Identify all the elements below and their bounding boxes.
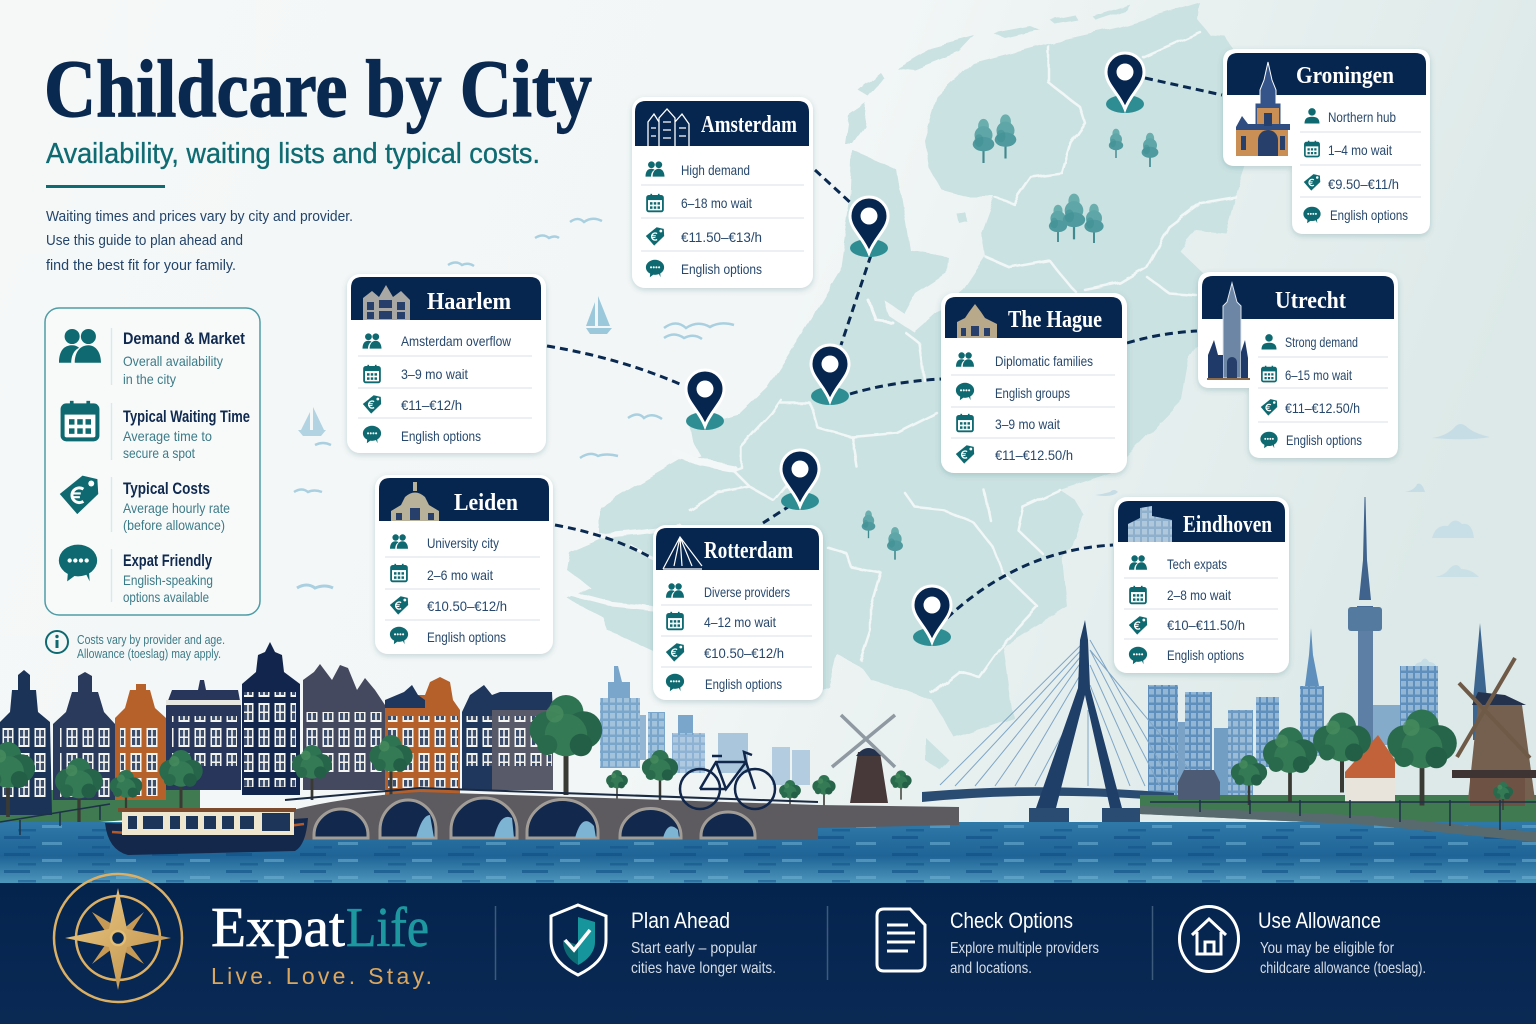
legend: demand and market: Overall availability — [123, 353, 223, 369]
water — [0, 822, 1536, 884]
card: Leiden: €10.50–€12/h — [427, 598, 507, 614]
skyline: TV tower — [1348, 497, 1382, 746]
icon: sailboat — [586, 296, 612, 334]
tip: check options: and locations. — [950, 960, 1032, 977]
card: Leiden: Leiden — [454, 490, 518, 516]
legend: typical costs: Average hourly rate — [123, 500, 230, 516]
tip: plan ahead: Plan Ahead — [631, 908, 730, 933]
card: Haarlem — [347, 274, 546, 453]
title: Childcare by City — [44, 43, 592, 134]
note: costs info: Allowance (toeslag) may apply. — [77, 647, 221, 661]
windmill: small — [832, 715, 895, 803]
card: Utrecht: Strong demand — [1285, 334, 1358, 350]
card: Haarlem: English options — [401, 428, 481, 444]
tip: use allowance: You may be eligible for — [1260, 940, 1395, 957]
card: Leiden: 2–6 mo wait — [427, 567, 493, 583]
tip: plan ahead: cities have longer waits. — [631, 960, 776, 977]
tip: use allowance: childcare allowance (toeslag). — [1260, 960, 1426, 977]
tip: check options — [877, 908, 1099, 977]
intro text: Waiting times and prices vary by city and provider. — [46, 208, 353, 225]
icon: distant sailboat — [298, 407, 326, 436]
card: The Hague: English groups — [995, 385, 1070, 401]
tip: use allowance — [1180, 906, 1426, 977]
trees — [0, 695, 1513, 824]
card: Haarlem: Amsterdam overflow — [401, 333, 512, 349]
logo: compass — [54, 874, 182, 1002]
tip: plan ahead — [551, 905, 776, 977]
sea decorations: waves and sailboats — [294, 219, 734, 588]
intro text: Use this guide to plan ahead and — [46, 232, 243, 249]
ground: right bank greenery — [1140, 795, 1536, 835]
header icon: gabled houses — [363, 285, 410, 320]
card: Groningen: English options — [1330, 207, 1408, 223]
legend: waiting time: secure a spot — [123, 445, 195, 461]
card: Rotterdam: 4–12 mo wait — [704, 614, 776, 630]
legend: demand and market: in the city — [123, 371, 176, 387]
logo: wordmark — [211, 897, 432, 989]
legend: expat friendly: Expat Friendly — [123, 551, 212, 570]
bridge: Erasmus — [922, 620, 1200, 822]
panel: legend — [45, 308, 260, 615]
logo: wordmark: Expat — [211, 897, 345, 959]
skyline: distant blue buildings left — [600, 666, 810, 785]
card: Utrecht: 6–15 mo wait — [1285, 367, 1352, 383]
sea channels through the south-west delta — [566, 300, 892, 608]
card: Leiden — [375, 475, 553, 654]
pins — [686, 53, 1144, 646]
canal houses — [0, 642, 553, 815]
bicycle — [680, 752, 775, 809]
boat — [105, 808, 308, 855]
card: Leiden: English options — [427, 629, 506, 645]
card: The Hague: 3–9 mo wait — [995, 416, 1060, 432]
card: The Hague: The Hague — [1008, 307, 1102, 333]
card: Groningen: Northern hub — [1328, 109, 1396, 125]
skyline: blue towers right — [1148, 628, 1438, 812]
legend: expat friendly: options available — [123, 589, 209, 605]
tip: check options: Explore multiple providers — [950, 940, 1099, 957]
card: Rotterdam: €10.50–€12/h — [704, 645, 784, 661]
header icon: domed hall — [391, 482, 439, 521]
card: Utrecht: Utrecht — [1275, 288, 1346, 314]
right quay edge — [1140, 806, 1536, 842]
card: Haarlem: Haarlem — [427, 289, 511, 315]
card: Groningen: Groningen — [1296, 63, 1394, 89]
card: Utrecht — [1198, 272, 1398, 458]
card: Rotterdam: English options — [705, 676, 782, 692]
card: Groningen — [1223, 49, 1430, 234]
ground: left bank greenery — [0, 790, 200, 838]
legend: waiting time: Average time to — [123, 428, 212, 444]
card: Haarlem: €11–€12/h — [401, 397, 462, 413]
card: Eindhoven: €10–€11.50/h — [1167, 617, 1245, 633]
note: costs info — [46, 631, 225, 661]
card: Groningen: 1–4 mo wait — [1328, 142, 1392, 158]
card: Amsterdam: English options — [681, 261, 762, 277]
house: orange roof on right bank — [1178, 735, 1395, 802]
card: Amsterdam: 6–18 mo wait — [681, 195, 752, 211]
legend: expat friendly — [59, 545, 213, 605]
card: Utrecht: English options — [1286, 432, 1362, 448]
intro text — [46, 208, 353, 274]
card: Eindhoven — [1114, 497, 1289, 673]
map trees — [862, 114, 1158, 560]
windmill: large with church spire — [1452, 623, 1536, 806]
map of the Netherlands — [566, 3, 1246, 770]
stone arch bridge — [285, 788, 959, 840]
logo: wordmark: Life — [346, 897, 429, 959]
card: Amsterdam: Amsterdam — [701, 112, 797, 138]
card: Amsterdam — [632, 97, 813, 288]
card: Haarlem: 3–9 mo wait — [401, 366, 468, 382]
legend: demand and market: Demand & Market — [123, 329, 245, 348]
legend: typical costs: (before allowance) — [123, 517, 225, 533]
header icon: canal houses — [648, 109, 689, 146]
card: Amsterdam: High demand — [681, 162, 750, 178]
tip: plan ahead: Start early – popular — [631, 940, 758, 957]
legend: typical costs: Typical Costs — [123, 479, 210, 498]
legend: demand and market — [59, 329, 245, 387]
legend: waiting time — [63, 401, 250, 461]
card: Eindhoven: English options — [1167, 647, 1244, 663]
header icon: parliament — [957, 304, 997, 338]
legend: expat friendly: English-speaking — [123, 572, 213, 588]
header icon: bridge — [663, 537, 702, 569]
railings — [0, 800, 1536, 835]
clouds — [1095, 279, 1490, 668]
legend: waiting time: Typical Waiting Time — [123, 407, 250, 426]
legend: typical costs — [60, 476, 230, 533]
card: Rotterdam: Rotterdam — [704, 538, 793, 564]
header icon: Dom tower — [1207, 283, 1250, 380]
logo: wordmark: Live. Love. Stay. — [211, 963, 432, 989]
card: Eindhoven: 2–8 mo wait — [1167, 587, 1231, 603]
card: The Hague: Diplomatic families — [995, 353, 1093, 369]
card: Rotterdam — [653, 525, 823, 700]
card: The Hague: €11–€12.50/h — [995, 447, 1073, 463]
card: Rotterdam: Diverse providers — [704, 584, 790, 600]
card: Eindhoven: Eindhoven — [1183, 512, 1272, 538]
tip: use allowance: Use Allowance — [1258, 908, 1381, 933]
card: Groningen: €9.50–€11/h — [1328, 176, 1399, 192]
footer band — [0, 883, 1536, 1024]
card: The Hague — [941, 293, 1127, 473]
card: Amsterdam: €11.50–€13/h — [681, 229, 762, 245]
card: Leiden: University city — [427, 535, 499, 551]
subtitle: Availability, waiting lists and typical costs. — [46, 138, 540, 170]
card: Eindhoven: Tech expats — [1167, 556, 1227, 572]
note: costs info: Costs vary by provider and age. — [77, 633, 225, 647]
header icon: office tower — [1128, 506, 1172, 542]
connector lines — [547, 78, 1222, 618]
tip: check options: Check Options — [950, 908, 1073, 933]
header icon: church — [1236, 62, 1290, 156]
card: Utrecht: €11–€12.50/h — [1285, 400, 1360, 416]
intro text: find the best fit for your family. — [46, 257, 236, 274]
